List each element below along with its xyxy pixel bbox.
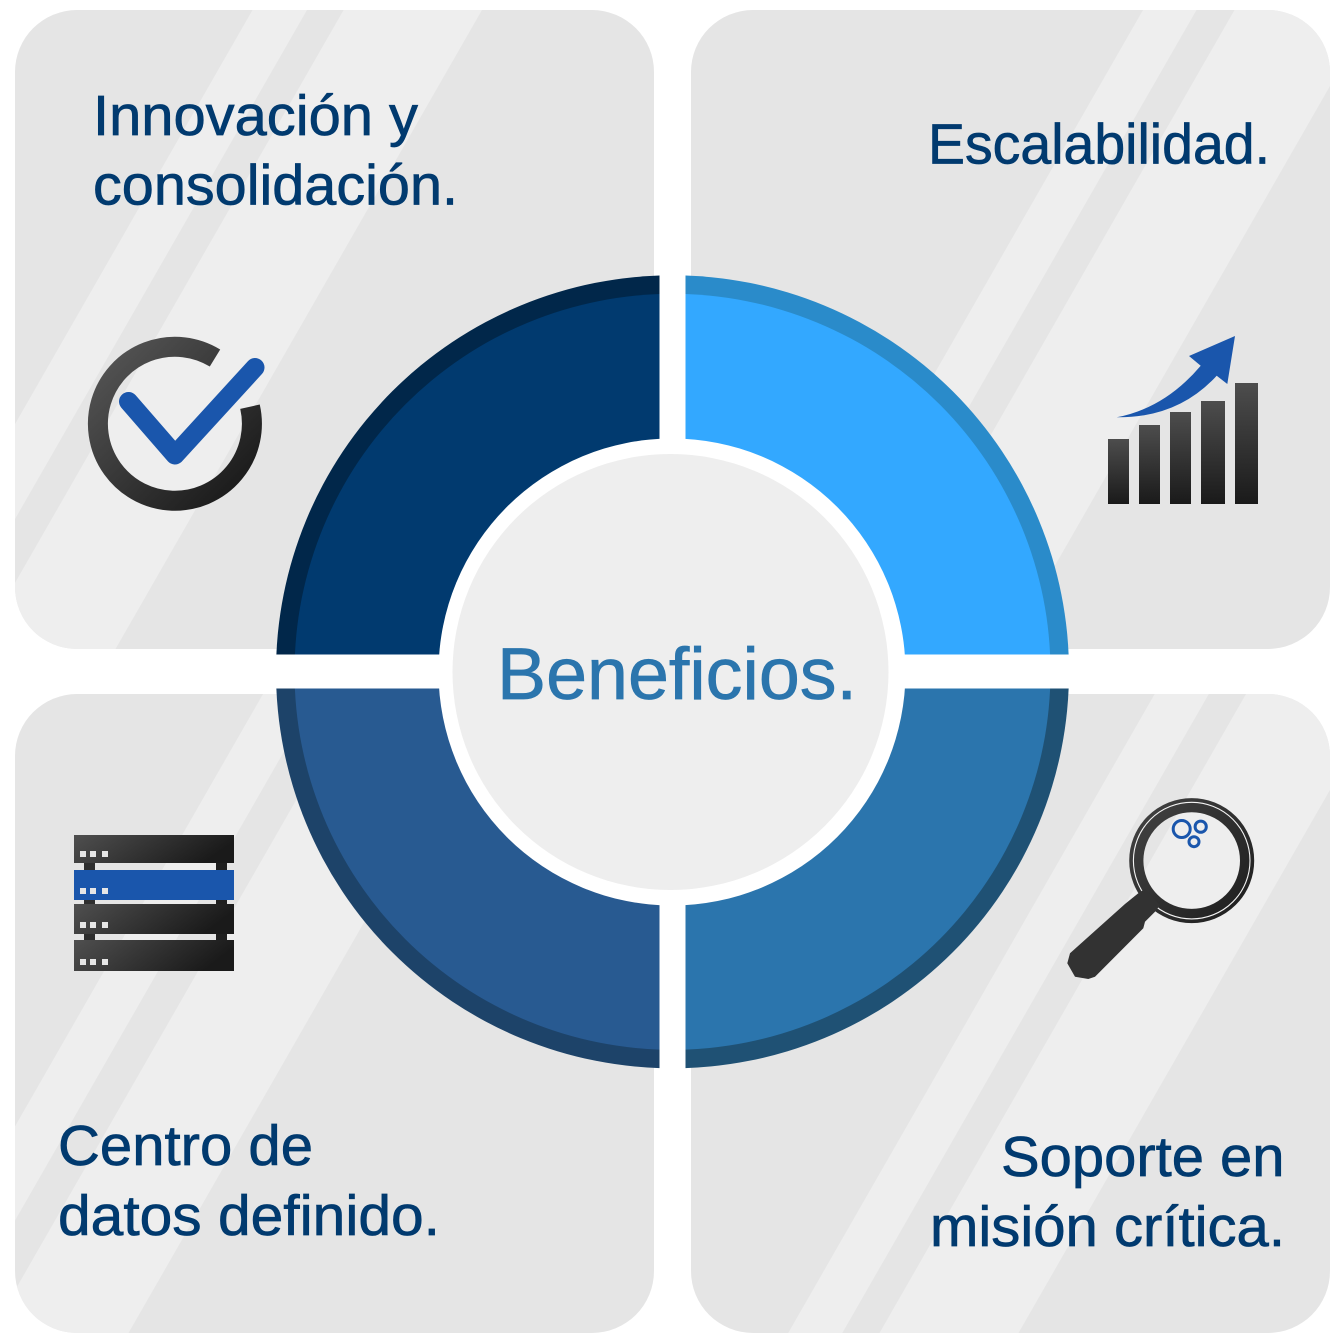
heading: innovación y consolidación	[93, 84, 458, 218]
donut segment: bottom left	[276, 688, 660, 1068]
donut hole gap	[438, 438, 906, 906]
heading: soporte en misión crítica: Soporte en	[1001, 1125, 1284, 1189]
icon: check mark in circle	[98, 347, 255, 501]
center title: beneficios: Beneficios.	[497, 634, 857, 715]
heading: centro de datos definido: Centro de	[58, 1114, 313, 1178]
panel: soporte en misión crítica	[691, 694, 1342, 1333]
panel: innovación y consolidación	[0, 10, 654, 649]
heading: escalabilidad: Escalabilidad.	[928, 112, 1270, 176]
heading: centro de datos definido	[58, 1114, 440, 1248]
heading: soporte en misión crítica: misión crítica.	[930, 1195, 1285, 1259]
icon: rising bar chart with arrow	[1108, 336, 1258, 504]
heading: centro de datos definido: datos definido.	[58, 1184, 440, 1248]
heading: innovación y consolidación: Innovación y	[93, 84, 419, 148]
donut segment: top right	[686, 276, 1069, 654]
donut segment: top left	[276, 276, 660, 654]
icon: server rack	[74, 835, 234, 971]
heading: innovación y consolidación: consolidación.	[93, 154, 458, 218]
center circle	[452, 454, 888, 890]
icon: magnifying glass with gears	[1067, 802, 1250, 979]
panel: escalabilidad	[691, 10, 1342, 649]
donut segment: bottom right	[686, 688, 1069, 1068]
panel: centro de datos definido	[0, 694, 654, 1333]
heading: soporte en misión crítica	[930, 1125, 1285, 1259]
